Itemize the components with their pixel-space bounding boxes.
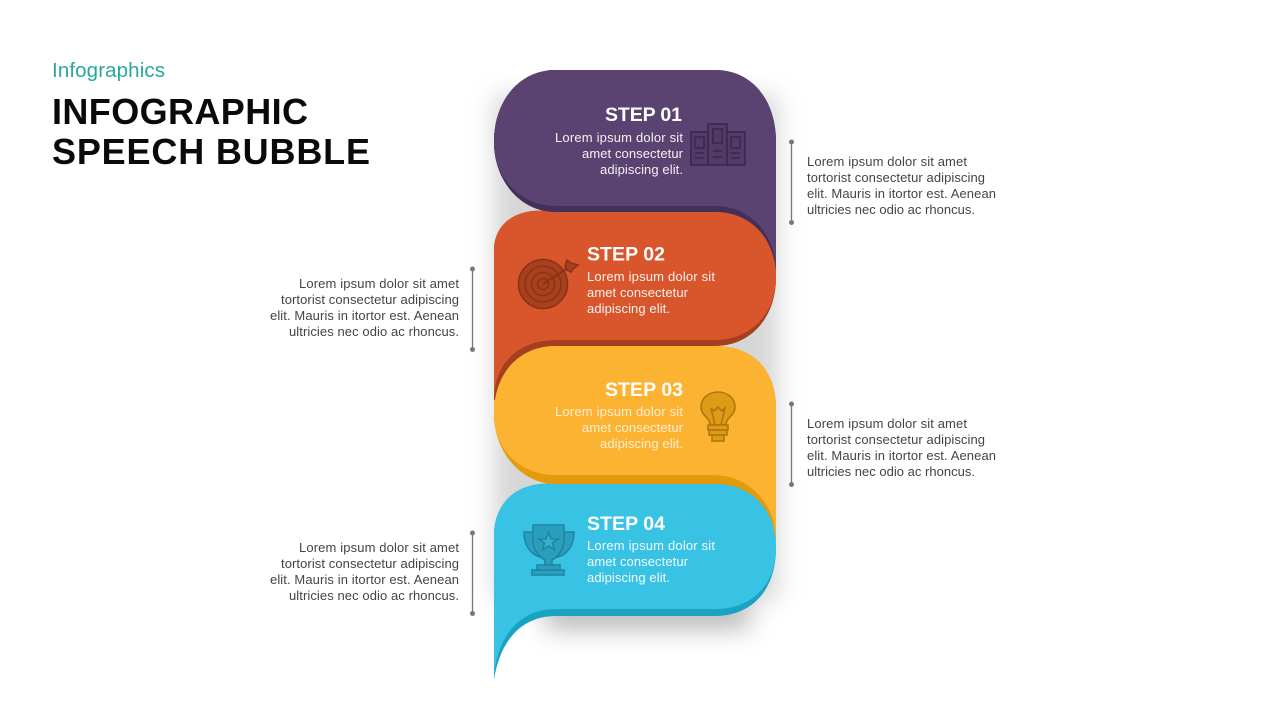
step 01 text: adipiscing elit. xyxy=(600,162,683,177)
callout: step 03: tortorist consectetur adipiscing xyxy=(807,432,985,447)
callout: step 02 xyxy=(270,266,475,352)
callout: step 04: Lorem ipsum dolor sit amet xyxy=(299,540,459,555)
step 04 heading: STEP 04 xyxy=(587,513,665,535)
bubble: step 04 blue xyxy=(494,484,776,680)
subtitle: Infographics xyxy=(52,59,165,82)
title xyxy=(52,91,370,172)
callout: step 04: ultricies nec odio ac rhoncus. xyxy=(289,588,459,603)
infographic canvas xyxy=(53,62,996,680)
callout: step 04: elit. Mauris in itortor est. Aenean xyxy=(270,572,459,587)
callout: step 04 xyxy=(270,530,475,616)
step 02 text xyxy=(587,269,715,316)
callout: step 01: Lorem ipsum dolor sit amet xyxy=(807,154,967,169)
callout: step 02: tortorist consectetur adipiscing xyxy=(281,292,459,307)
bubble: step 01 purple xyxy=(494,70,776,276)
step 01 text xyxy=(555,130,684,177)
callout: step 01: elit. Mauris in itortor est. Aenean xyxy=(807,186,996,201)
icon: light bulb xyxy=(701,392,735,441)
title: INFOGRAPHIC xyxy=(52,91,308,132)
step 03 bubble front lip over blue xyxy=(494,400,556,484)
callout: step 02: ultricies nec odio ac rhoncus. xyxy=(289,324,459,339)
bubble: step 02 orange xyxy=(494,211,776,420)
step 03 text: Lorem ipsum dolor sit xyxy=(555,404,683,419)
soft shadows behind the bubbles xyxy=(494,95,778,630)
bubble: step 03 yellow xyxy=(494,346,776,545)
callout: step 03: ultricies nec odio ac rhoncus. xyxy=(807,464,975,479)
step 02 heading: STEP 02 xyxy=(587,244,665,266)
step 04 text: amet consectetur xyxy=(587,554,689,569)
callout: step 01 xyxy=(789,140,996,225)
step 04 text: Lorem ipsum dolor sit xyxy=(587,538,715,553)
callout: step 02: Lorem ipsum dolor sit amet xyxy=(299,276,459,291)
step 01 text: Lorem ipsum dolor sit xyxy=(555,130,683,145)
step 01 text: amet consectetur xyxy=(582,146,684,161)
callout: step 03: elit. Mauris in itortor est. Aenean xyxy=(807,448,996,463)
callout: step 01: tortorist consectetur adipiscing xyxy=(807,170,985,185)
step 04 text xyxy=(587,538,715,585)
callout: step 01: ultricies nec odio ac rhoncus. xyxy=(807,202,975,217)
icon: books xyxy=(691,124,745,165)
icon: trophy xyxy=(524,525,574,575)
callout: step 04: tortorist consectetur adipiscing xyxy=(281,556,459,571)
title: SPEECH BUBBLE xyxy=(52,131,370,172)
step 02 text: adipiscing elit. xyxy=(587,301,670,316)
icon: target with dart xyxy=(518,260,578,308)
step 02 text: amet consectetur xyxy=(587,285,689,300)
step 03 heading: STEP 03 xyxy=(605,379,683,401)
step 03 text: adipiscing elit. xyxy=(600,436,683,451)
step 02 text: Lorem ipsum dolor sit xyxy=(587,269,715,284)
callout: step 02: elit. Mauris in itortor est. Aenean xyxy=(270,308,459,323)
step 03 text xyxy=(555,404,684,451)
callout: step 03: Lorem ipsum dolor sit amet xyxy=(807,416,967,431)
step 04 text: adipiscing elit. xyxy=(587,570,670,585)
step 01 heading: STEP 01 xyxy=(605,104,682,126)
callout: step 03 xyxy=(789,402,996,487)
step 01 bubble front lip over orange xyxy=(494,70,556,212)
step 03 text: amet consectetur xyxy=(582,420,684,435)
